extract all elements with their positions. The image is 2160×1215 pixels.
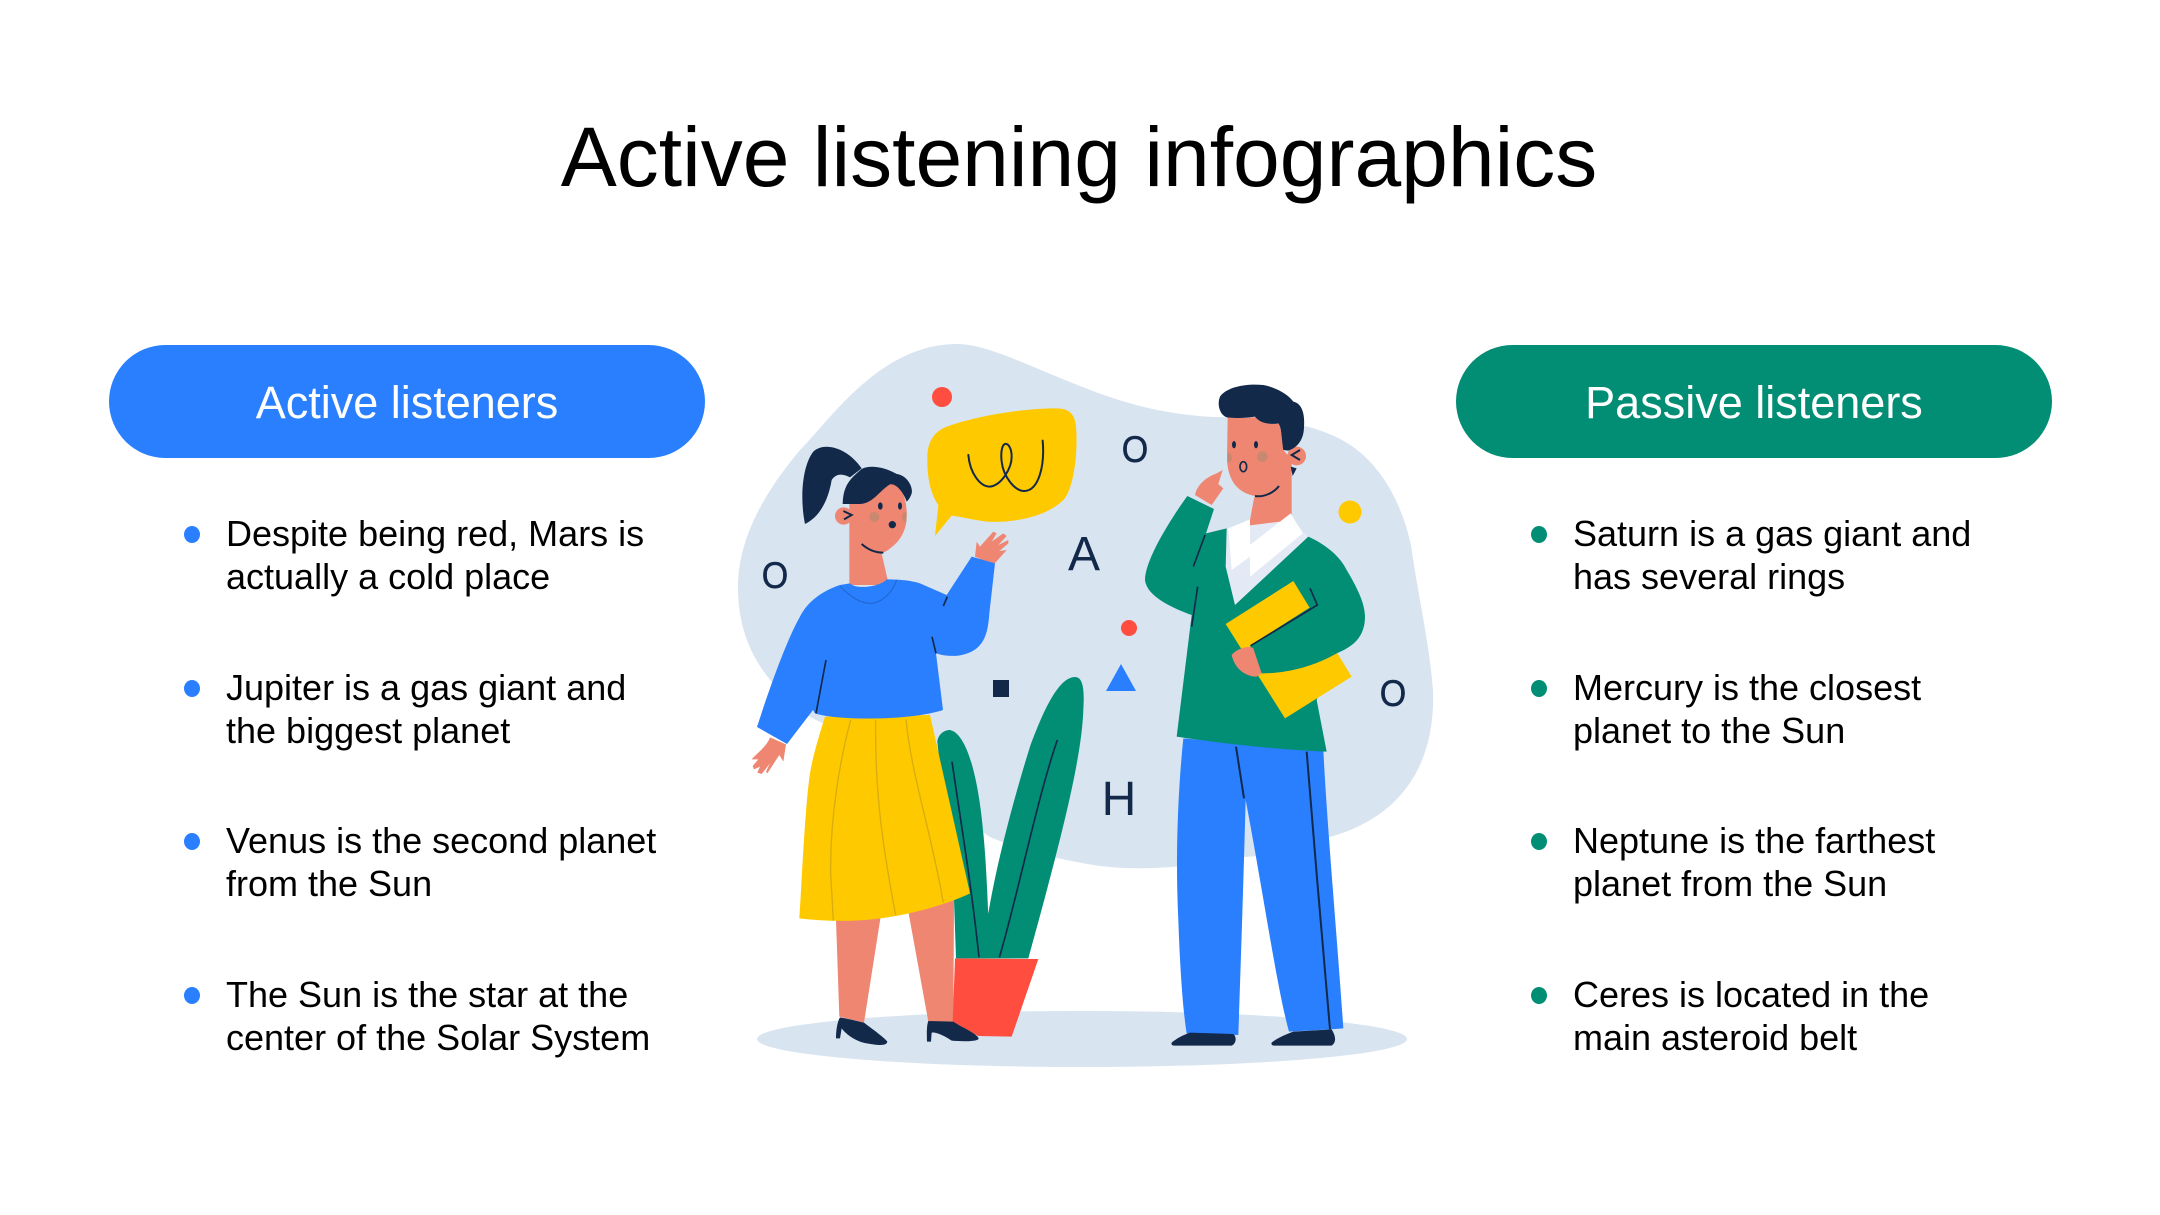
woman upper body and speech bubble [757, 408, 1077, 744]
shirt and collar [1226, 520, 1308, 605]
list: active listeners [184, 513, 656, 1058]
ground shadow [757, 1011, 1407, 1067]
background blob [738, 344, 1433, 868]
bullet: Jupiter: the biggest planet [226, 710, 510, 750]
forearm [1250, 570, 1365, 673]
bullet: Neptune: planet from the Sun [1573, 863, 1887, 904]
face details [843, 502, 907, 553]
bullet: Neptune: Neptune is the farthest [1573, 820, 1935, 861]
bullet: Venus: Venus is the second planet [226, 820, 656, 861]
header pill: Passive listeners [1456, 345, 2052, 458]
bullet: Mercury: planet to the Sun [1573, 710, 1845, 750]
bullet: Venus: from the Sun [226, 863, 432, 904]
bullet: Sun: center of the Solar System [226, 1017, 650, 1058]
bullet: Venus [184, 820, 656, 904]
floating letters and shapes: H [1102, 773, 1136, 826]
neck and face [1227, 417, 1292, 547]
bullet: Saturn [1531, 513, 1971, 597]
bullet: Ceres: main asteroid belt [1573, 1017, 1857, 1058]
legs [836, 900, 954, 1023]
bullet: Mars: actually a cold place [226, 556, 550, 597]
man [1171, 738, 1343, 1046]
plant leaves [937, 677, 1084, 958]
bullet: Mars [184, 513, 644, 597]
title: Active listening infographics [561, 110, 1597, 204]
header pill: Active listeners [109, 345, 705, 458]
floating letters and shapes [762, 387, 1406, 826]
trousers [1177, 738, 1343, 1035]
yellow folder [1226, 581, 1352, 718]
bullet: Jupiter: Jupiter is a gas giant and [226, 666, 626, 708]
skirt [799, 715, 970, 921]
neck, face and ear [849, 480, 907, 585]
bullet: Saturn: Saturn is a gas giant and [1573, 513, 1971, 554]
bullet: Neptune [1531, 820, 1935, 904]
speech bubble [927, 408, 1077, 536]
bullet: Ceres: Ceres is located in the [1573, 974, 1929, 1015]
man's face details [1228, 441, 1300, 496]
blue sweater [757, 557, 995, 744]
ponytail [802, 447, 862, 524]
floating letters and shapes: A [1068, 528, 1100, 581]
floating letters and shapes: O [762, 555, 788, 596]
man upper body [1145, 385, 1365, 752]
floating letters and shapes: O [1380, 673, 1406, 714]
holding hand [1232, 647, 1262, 677]
bullet: Mercury: Mercury is the closest [1573, 666, 1921, 708]
man's hair [1219, 385, 1304, 476]
green sweater [1145, 496, 1347, 752]
header pill: Passive listeners: Passive listeners [1585, 377, 1923, 428]
floating letters and shapes: O [1122, 429, 1148, 470]
bullet: Mercury [1531, 666, 1921, 750]
bullet: Mars: Despite being red, Mars is [226, 513, 644, 554]
plant and woman lower body [752, 677, 1084, 1045]
raised hand [1195, 470, 1223, 505]
bullet: Sun [184, 974, 650, 1058]
bullet: Sun: The Sun is the star at the [226, 974, 628, 1015]
plant pot [953, 958, 1038, 1037]
lower hand [752, 737, 786, 774]
header pill: Active listeners: Active listeners [256, 377, 558, 428]
man's shoes [1171, 1029, 1335, 1046]
shoes [836, 1017, 979, 1045]
bullet: Saturn: has several rings [1573, 556, 1845, 597]
raised hand [975, 532, 1008, 565]
bullet: Jupiter [184, 666, 626, 750]
hair [843, 467, 912, 504]
list: passive listeners [1531, 513, 1971, 1058]
bullet: Ceres [1531, 974, 1929, 1058]
